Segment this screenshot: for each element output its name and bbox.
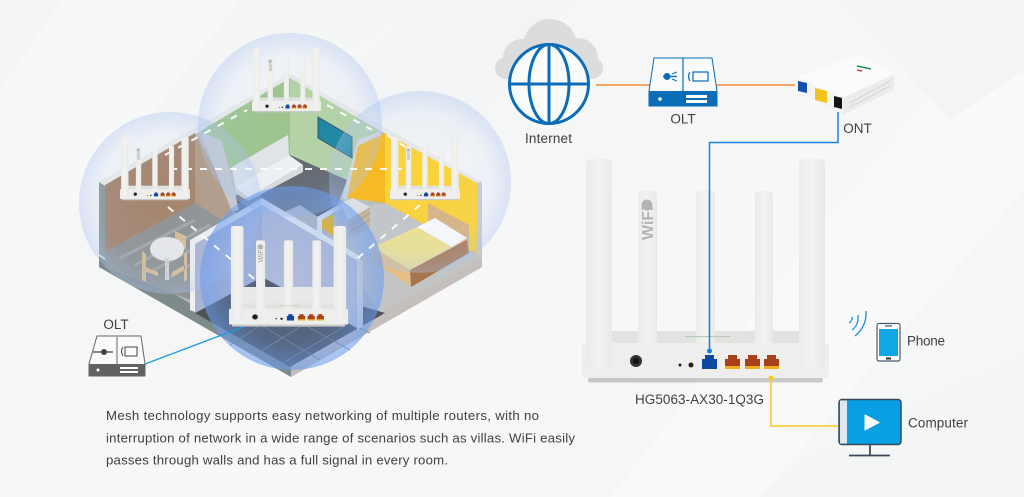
label: router model: HG5063-AX30-1Q3G [635, 392, 764, 407]
orange wall stub [322, 214, 333, 236]
room: dining brown wall [105, 133, 195, 252]
partition wall left [200, 132, 239, 212]
wifi coverage bubble: left [79, 112, 261, 294]
dining table [142, 231, 187, 282]
icon: cloud [495, 19, 603, 79]
mini router: right [390, 137, 460, 200]
label: OLT: OLT [670, 112, 696, 126]
bed [372, 203, 469, 287]
link: router LAN to computer [768, 376, 838, 426]
front room right wall [262, 205, 357, 328]
link: OLT to ONT [716, 84, 795, 86]
icon: internet globe [510, 44, 588, 124]
sofa [232, 135, 303, 201]
dresser [336, 198, 370, 238]
partition wall right [342, 131, 382, 200]
right slab edge [291, 252, 482, 377]
floor tile grid [230, 300, 370, 365]
room: bedroom orange wall [347, 133, 385, 203]
icon: computer [839, 400, 901, 456]
room: living green right wall [290, 78, 380, 180]
bedroom stub wall [317, 205, 342, 240]
label: left OLT: OLT [103, 317, 129, 332]
room: bedroom floor [317, 203, 482, 313]
top of outer walls [99, 74, 482, 260]
description paragraph: interruption of network in a wide range of scenarios such as villas. WiFi easily [106, 430, 575, 446]
right stub wall [357, 258, 363, 330]
dashed mesh links [165, 105, 420, 282]
link: left OLT to router [145, 327, 243, 364]
room: living dark floor [233, 155, 347, 232]
link: ONT to router WAN port [707, 112, 838, 354]
icon: phone [877, 324, 900, 361]
wifi coverage bubble: front [200, 186, 384, 370]
icon: ONT device [795, 55, 894, 115]
front router in house [229, 226, 348, 327]
icon: OLT device [649, 58, 717, 106]
label: Internet: Internet [525, 131, 572, 146]
mini router: top [252, 48, 321, 112]
description paragraph: passes through walls and has a full signal in every room. [106, 452, 448, 468]
front wall tops [190, 198, 360, 312]
room: dining brown side wall [195, 133, 238, 235]
icon: wifi waves [849, 311, 866, 336]
label: ONT: ONT [843, 121, 872, 136]
link: internet to OLT [596, 84, 650, 86]
isometric house illustration [99, 74, 482, 377]
front room floor [195, 277, 385, 367]
room: dining floor [105, 203, 240, 300]
description paragraph: Mesh technology supports easy networking of multiple routers, with no [106, 408, 539, 423]
label: Phone: Phone [907, 334, 945, 348]
right wall outer side [477, 182, 482, 258]
front room left wall [195, 205, 262, 313]
icon: left OLT device [89, 336, 145, 376]
left wall outer side [99, 182, 105, 258]
house base slab [99, 78, 482, 377]
wall TV [318, 117, 352, 158]
main router HG5063-AX30-1Q3G [582, 159, 829, 382]
floor planks [120, 220, 215, 280]
description paragraph [106, 408, 575, 468]
wifi coverage bubble: right [329, 91, 511, 273]
room: bedroom yellow wall [385, 133, 477, 254]
wifi coverage bubble: top [198, 33, 382, 217]
left slab edge [99, 250, 291, 377]
front router back panel [243, 287, 335, 311]
label: Computer: Computer [908, 416, 968, 430]
mini router: left [120, 137, 190, 200]
room: living green left wall [202, 78, 290, 167]
